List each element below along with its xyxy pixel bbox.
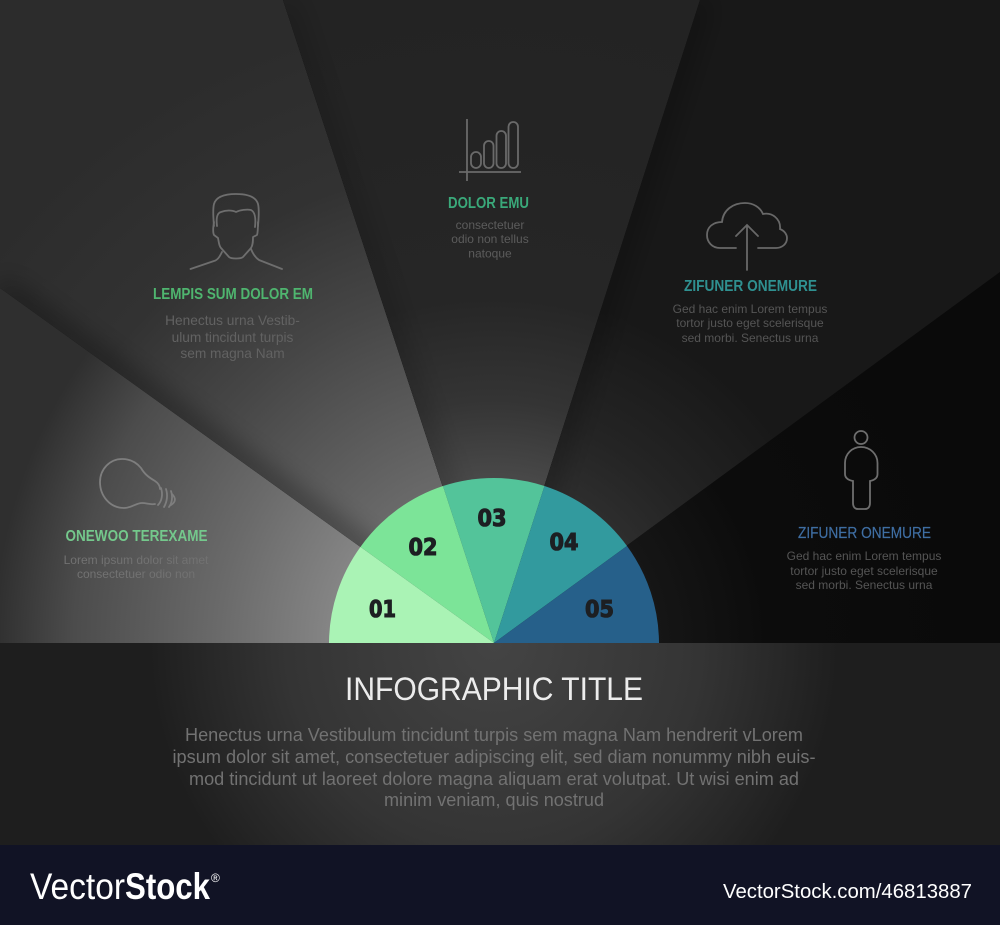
block 2: lempis sum dolor em xyxy=(153,194,313,361)
icon: bar chart xyxy=(459,119,521,181)
block 3: dolor emu xyxy=(448,119,529,260)
body text: Ged hac enim Lorem tempus xyxy=(673,302,827,316)
heading: ONEWOO TEREXAME xyxy=(66,528,208,545)
body text: Ged hac enim Lorem tempus xyxy=(787,549,941,563)
body text: ulum tincidunt turpis xyxy=(172,330,294,345)
title: INFOGRAPHIC TITLE xyxy=(345,671,643,707)
description text: minim veniam, quis nostrud xyxy=(384,790,604,810)
pie segment 04 xyxy=(494,486,627,643)
body text: natoque xyxy=(468,246,512,260)
body text: tortor justo eget scelerisque xyxy=(676,316,824,330)
icon: cloud upload xyxy=(707,203,787,270)
body text: sed morbi. Senectus urna xyxy=(682,331,819,345)
watermark band xyxy=(0,845,1000,925)
description text: ipsum dolor sit amet, consectetuer adipiscing elit, sed diam nonummy nibh euis- xyxy=(172,747,816,767)
block 4: zifuner onemure upper xyxy=(673,203,827,345)
number 01: 01 xyxy=(369,597,396,623)
pie segment 01 xyxy=(329,547,494,643)
pie segment 03 xyxy=(443,478,544,643)
heading: ZIFUNER ONEMURE xyxy=(684,278,817,295)
logo: ® xyxy=(211,871,220,885)
body text: consectetuer xyxy=(456,218,524,232)
description text xyxy=(172,725,816,810)
icon: light bulb xyxy=(100,459,175,508)
wedge 5 background xyxy=(494,272,1000,643)
block 5: zifuner onemure lower xyxy=(787,431,941,592)
wedge 3 background xyxy=(283,0,700,643)
logo xyxy=(30,866,220,907)
wedge 2 background xyxy=(0,0,442,578)
logo: Vector xyxy=(30,866,125,907)
description text: mod tincidunt ut laoreet dolore magna aliquam erat volutpat. Ut wisi enim ad xyxy=(189,769,799,789)
logo: Stock xyxy=(125,866,210,907)
body text: consectetuer odio non xyxy=(77,567,195,581)
wedge 4 background xyxy=(544,328,768,546)
heading: LEMPIS SUM DOLOR EM xyxy=(153,286,313,303)
panel: fan background xyxy=(0,0,768,643)
pie segment 05 xyxy=(494,546,659,643)
body text: odio non tellus xyxy=(451,232,529,246)
band background xyxy=(0,845,1000,925)
number 03: 03 xyxy=(478,506,506,532)
number 05: 05 xyxy=(585,597,614,623)
wedge 1 background xyxy=(0,288,494,643)
pie segment 02 xyxy=(360,486,494,643)
icon: man head xyxy=(190,194,282,269)
semicircle pie xyxy=(329,478,659,643)
body text: sed morbi. Senectus urna xyxy=(796,578,933,592)
body text: sem magna Nam xyxy=(180,346,285,361)
number 04: 04 xyxy=(550,530,578,556)
icon: person xyxy=(845,431,878,509)
body text: tortor justo eget scelerisque xyxy=(790,564,938,578)
number 02: 02 xyxy=(408,535,438,561)
description text: Henectus urna Vestibulum tincidunt turpis sem magna Nam hendrerit vLorem xyxy=(185,725,803,745)
body text: Lorem ipsum dolor sit amet xyxy=(64,553,209,567)
heading: DOLOR EMU xyxy=(448,195,529,212)
block 1: onewoo terexame xyxy=(64,459,209,581)
image id: VectorStock.com/46813887 xyxy=(723,881,972,903)
body text: Henectus urna Vestib- xyxy=(165,313,300,328)
heading: ZIFUNER ONEMURE xyxy=(798,525,931,542)
panel: bottom title band xyxy=(0,643,1000,845)
